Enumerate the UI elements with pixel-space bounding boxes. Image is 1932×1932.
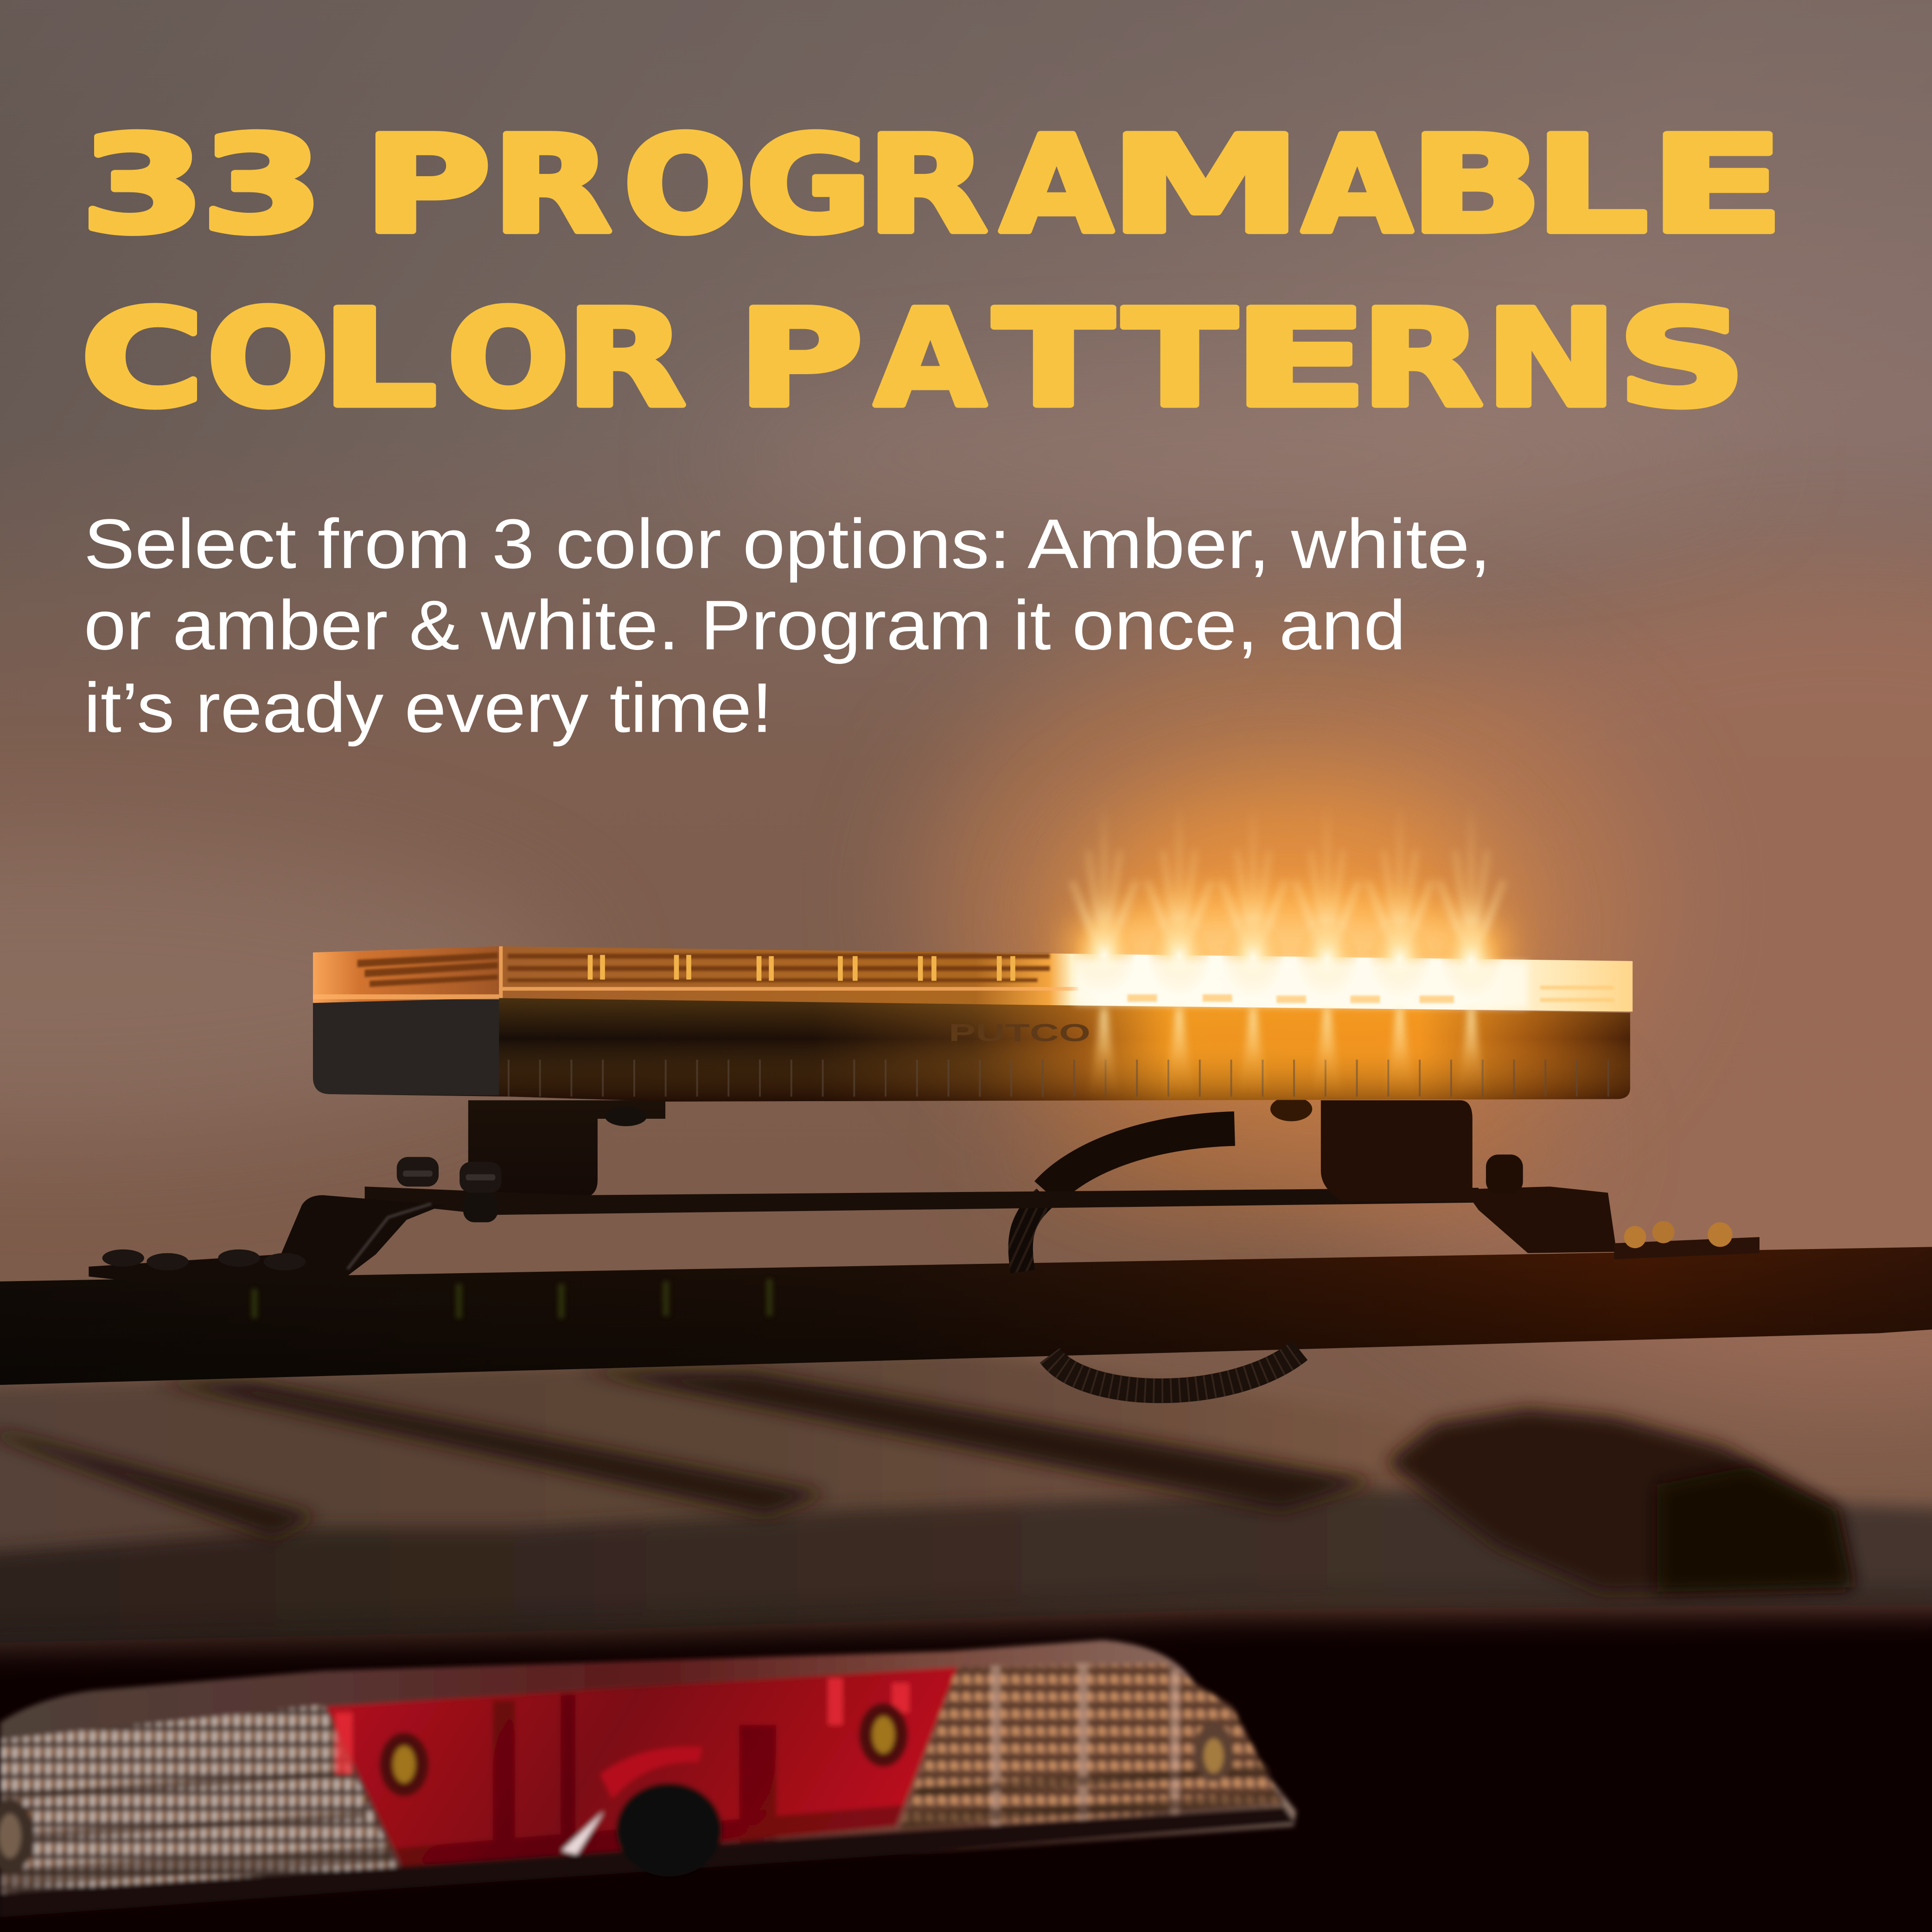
roof grooves (0, 1370, 1377, 1538)
title: E (1233, 281, 1368, 436)
title: O (447, 281, 569, 436)
roof lower band (0, 1488, 1932, 1639)
dark lower body (0, 1604, 1932, 1932)
description text: it’s ready every time! (84, 669, 772, 747)
screws (0, 1703, 1233, 1873)
title: G (746, 108, 872, 262)
title: N (1486, 281, 1617, 436)
red highlights (335, 1678, 909, 1774)
title: L (1535, 108, 1648, 262)
roof rack crossbar (0, 1247, 1932, 1385)
right clear lens (899, 1664, 1284, 1830)
title: L (321, 281, 437, 436)
title: M (1109, 108, 1302, 262)
title: P (363, 108, 491, 262)
amber light glow (918, 628, 1657, 1214)
title: B (1409, 108, 1543, 262)
title: A (875, 281, 987, 436)
title: O (207, 281, 329, 436)
nuts (102, 1106, 647, 1270)
strobe light bar lens (313, 946, 1632, 1012)
third brake light assembly (0, 1640, 1296, 1917)
center bolt (562, 1783, 722, 1876)
title: C (81, 281, 204, 436)
title: A (1001, 108, 1114, 262)
title: R (1361, 281, 1483, 436)
heat sink ribs (508, 1059, 1623, 1097)
left clear lens (0, 1705, 397, 1893)
title: 3 (81, 108, 205, 262)
lower chrome edge (0, 1806, 1296, 1917)
title: R (867, 108, 988, 262)
title: P (738, 281, 863, 436)
LED star bursts (1072, 807, 1614, 1099)
title: T (1123, 281, 1237, 436)
title: T (994, 281, 1114, 436)
title: A (1302, 108, 1413, 262)
description text: Select from 3 color options: Amber, white, (84, 505, 1491, 583)
red center lens (326, 1667, 957, 1870)
strobe light bar housing (313, 997, 1630, 1102)
brand mark on housing: PUTCO (949, 1020, 1090, 1047)
left mounting bracket and foot (89, 1100, 1479, 1284)
title (81, 108, 1785, 436)
coiled cable (1020, 1129, 1300, 1391)
foot plate (89, 1195, 444, 1284)
truck roof, blurred (0, 1349, 1932, 1932)
title: 3 (202, 108, 324, 262)
LED reflector marks (588, 955, 1015, 981)
title: R (566, 281, 686, 436)
left end face (313, 998, 499, 1096)
right mounting bracket and foot (1270, 1097, 1617, 1253)
horizontal rail (365, 1186, 1479, 1215)
description text: or amber & white. Program it once, and (84, 587, 1406, 665)
roof marker light (1386, 1409, 1852, 1592)
description text (84, 505, 1491, 747)
title: R (492, 108, 612, 262)
title: E (1649, 108, 1785, 262)
title: O (624, 108, 746, 262)
housing top (0, 1640, 1296, 1916)
right end plate with rivets (1614, 1221, 1760, 1259)
title: S (1617, 281, 1747, 436)
